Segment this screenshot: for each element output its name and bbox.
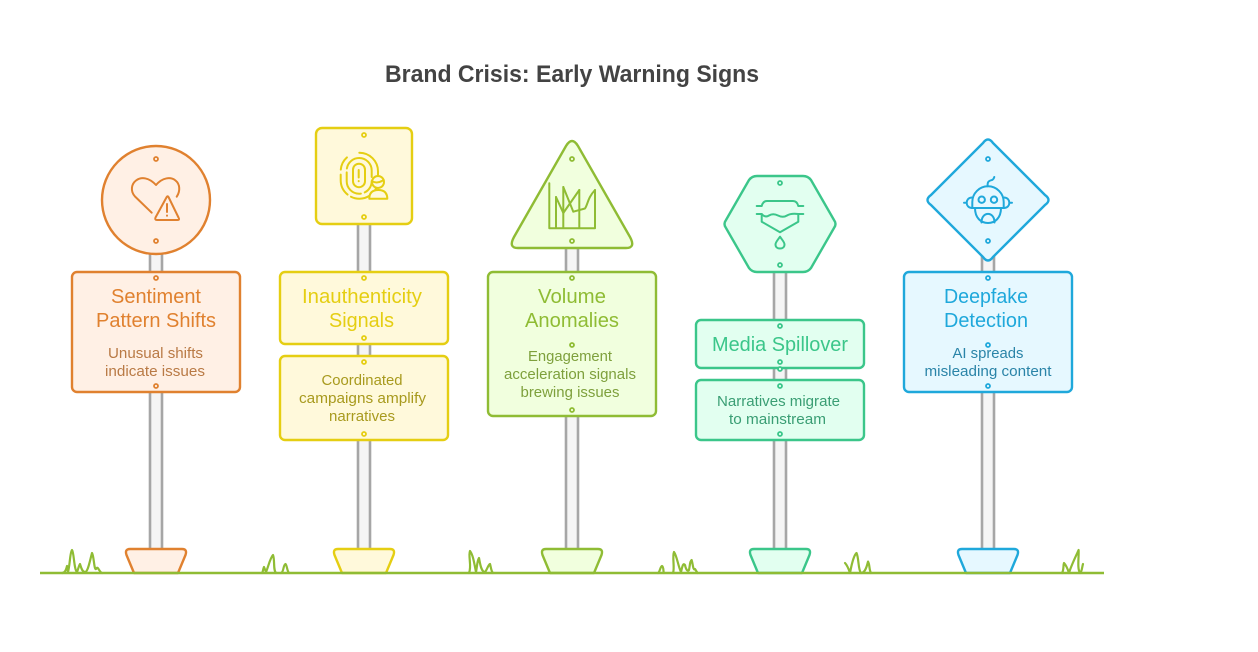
base xyxy=(542,549,602,573)
description: to mainstream xyxy=(729,412,826,428)
pole xyxy=(358,220,370,552)
heading: Detection xyxy=(944,309,1028,332)
heading xyxy=(96,285,216,332)
diamond sign xyxy=(928,140,1048,260)
description: brewing issues xyxy=(520,385,620,401)
heading: Signals xyxy=(329,309,394,332)
base xyxy=(750,549,810,573)
title: Brand Crisis: Early Warning Signs xyxy=(385,61,759,88)
description: Unusual shifts xyxy=(108,346,203,362)
sign post: Media Spillover xyxy=(696,176,864,573)
icon: fingerprint with person xyxy=(341,153,387,199)
description: Coordinated xyxy=(322,373,402,389)
heading: Media Spillover xyxy=(712,333,848,356)
heading: Pattern Shifts xyxy=(96,309,216,332)
heading xyxy=(944,285,1028,332)
description xyxy=(299,373,427,425)
panel: heading and description xyxy=(488,272,656,416)
heading: Deepfake xyxy=(944,285,1028,308)
pole xyxy=(982,250,994,552)
square sign xyxy=(316,128,412,224)
pole xyxy=(150,250,162,552)
icon: sad robot xyxy=(964,177,1012,223)
description xyxy=(924,346,1052,380)
description: misleading content xyxy=(924,364,1052,380)
sign post: Deepfake Detection xyxy=(904,140,1072,573)
heading: Volume xyxy=(538,285,606,308)
description: campaigns amplify xyxy=(299,391,427,407)
description: indicate issues xyxy=(105,364,205,380)
icon: overflowing vessel and drop xyxy=(757,201,803,248)
sign post: Volume Anomalies xyxy=(488,141,656,573)
description: narratives xyxy=(329,409,395,425)
description: Engagement xyxy=(528,349,612,365)
heading: Sentiment xyxy=(111,285,201,308)
triangle sign xyxy=(512,141,632,248)
panel: heading xyxy=(696,320,864,368)
panel: description xyxy=(280,356,448,440)
description xyxy=(504,349,636,401)
sign post: Sentiment Pattern Shifts xyxy=(72,146,240,573)
panel: description xyxy=(696,380,864,440)
description xyxy=(105,346,205,380)
ground with grass xyxy=(40,550,1104,573)
icon: anomalous line chart xyxy=(549,183,595,228)
panel: heading xyxy=(280,272,448,344)
icon: heart with warning triangle xyxy=(132,178,179,220)
circular sign xyxy=(102,146,210,254)
base xyxy=(958,549,1018,573)
description: Narratives migrate xyxy=(717,394,840,410)
heading xyxy=(525,285,619,332)
pole xyxy=(774,265,786,552)
hexagon sign xyxy=(724,176,836,272)
heading: Anomalies xyxy=(525,309,619,332)
heading xyxy=(302,285,423,332)
panel: heading and description xyxy=(72,272,240,392)
description xyxy=(717,394,840,428)
sign post: Inauthenticity Signals xyxy=(280,128,448,573)
heading: Inauthenticity xyxy=(302,285,423,308)
base xyxy=(126,549,186,573)
panel: heading and description xyxy=(904,272,1072,392)
description: acceleration signals xyxy=(504,367,636,383)
pole xyxy=(566,240,578,552)
description: AI spreads xyxy=(952,346,1024,362)
base xyxy=(334,549,394,573)
